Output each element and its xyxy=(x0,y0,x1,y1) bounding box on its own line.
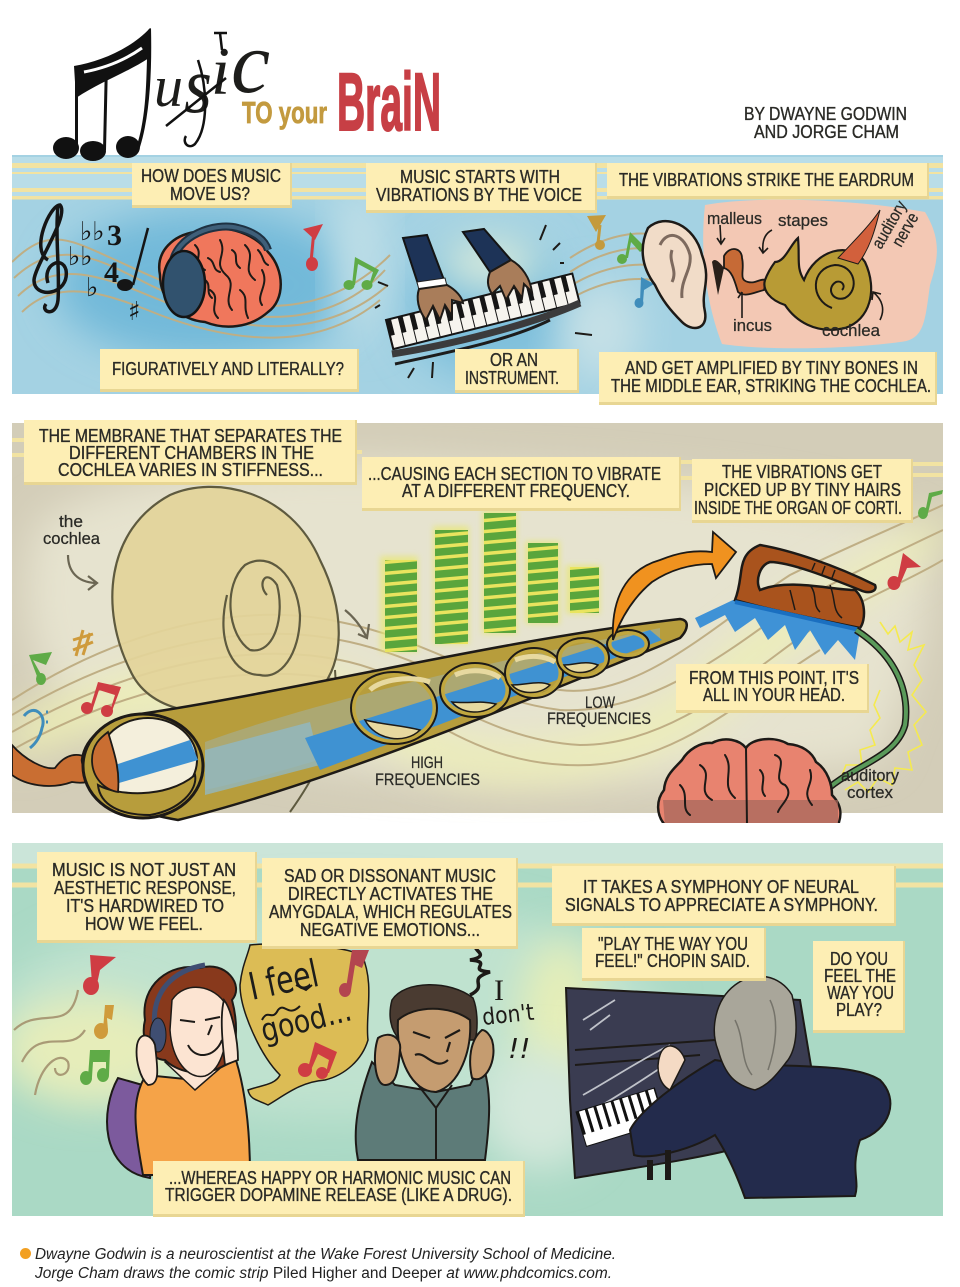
caption: do you feel the way you play: DO YOU xyxy=(830,949,888,969)
panel: how music reaches the ear xyxy=(12,155,943,405)
caption: different frequency: AT A DIFFERENT FREQUENCY. xyxy=(402,481,630,501)
caption: membrane stiffness: THE MEMBRANE THAT SEPARATES THE xyxy=(39,426,342,446)
caption: figuratively and literally xyxy=(100,349,359,392)
caption: organ of Corti: PICKED UP BY TINY HAIRS xyxy=(704,480,901,500)
title word: usic xyxy=(154,15,270,130)
icon: green note upper right xyxy=(918,490,943,519)
illustration: girl with headphones xyxy=(107,965,250,1178)
title word: usic: c xyxy=(231,15,270,112)
title word: usic: u xyxy=(154,54,183,119)
caption: hardwired to how we feel: HOW WE FEEL. xyxy=(85,914,203,934)
byline xyxy=(744,104,907,142)
labels: FREQUENCIES xyxy=(547,709,651,728)
icon: treble clef and time signature: ♭ xyxy=(86,273,98,303)
icon: gold note xyxy=(94,1005,114,1039)
caption: dopamine release: ...WHEREAS HAPPY OR HARMONIC MUSIC CAN xyxy=(169,1168,511,1188)
illustration: man covering ears xyxy=(356,945,535,1160)
caption: different frequency xyxy=(362,457,681,511)
ear labels xyxy=(707,197,922,340)
icon: blue basilar hairs xyxy=(695,600,860,660)
icon: bass clef xyxy=(24,710,48,748)
tube opening xyxy=(83,714,203,818)
caption: or an instrument: OR AN xyxy=(490,350,538,370)
illustration: man covering ears: !! xyxy=(508,1032,530,1065)
icon: squiggly music lines xyxy=(14,990,85,1095)
caption: membrane stiffness: DIFFERENT CHAMBERS IN THE xyxy=(69,443,314,463)
orange-brown stapes stub xyxy=(12,745,96,786)
labels: the xyxy=(59,512,83,531)
icon: green note xyxy=(617,232,642,264)
illustration: pianist at grand piano xyxy=(566,976,890,1198)
labels xyxy=(43,512,899,802)
ear labels: malleus xyxy=(707,209,762,228)
speech blob: I feel xyxy=(245,951,322,1009)
caption: Chopin quote: "PLAY THE WAY YOU xyxy=(598,934,748,954)
footer credits xyxy=(20,1246,616,1282)
icon: middle ear bones xyxy=(712,249,766,295)
icon: organ of Corti xyxy=(735,545,876,630)
caption: all in your head xyxy=(676,664,869,713)
icon: brain with headphones xyxy=(159,227,281,327)
caption: how does music move us: MOVE US? xyxy=(170,184,250,204)
pianist keys xyxy=(576,1088,665,1146)
icon: cochlea label arrow xyxy=(68,555,97,590)
gold staff strip xyxy=(12,440,943,478)
caption: amplified by tiny bones xyxy=(599,352,937,405)
labels: auditory xyxy=(841,766,899,785)
byline: BY DWAYNE GODWIN xyxy=(744,104,907,124)
caption: amygdala xyxy=(262,858,518,949)
caption: organ of Corti: THE VIBRATIONS GET xyxy=(722,462,882,482)
caption: symphony of neural signals: IT TAKES A SYMPHONY OF NEURAL xyxy=(583,877,859,897)
caption: amygdala: AMYGDALA, WHICH REGULATES xyxy=(269,902,512,922)
caption: membrane stiffness xyxy=(24,420,357,485)
caption: dopamine release: TRIGGER DOPAMINE RELEASE (LIKE A DRUG). xyxy=(165,1185,512,1205)
icon: treble clef and time signature: ♭♭ xyxy=(68,242,93,272)
icon: curved orange arrow xyxy=(613,532,736,640)
caption: organ of Corti: INSIDE THE ORGAN OF CORTI. xyxy=(694,498,902,518)
ear labels: auditory xyxy=(868,197,911,252)
icon: green double note xyxy=(80,1050,110,1085)
icon: treble clef and time signature: 3 xyxy=(107,219,122,252)
vibration ticks xyxy=(375,225,592,378)
caption: hardwired to how we feel: IT'S HARDWIRED TO xyxy=(66,896,224,916)
illustration: man covering ears: I xyxy=(494,974,504,1007)
caption: membrane stiffness: COCHLEA VARIES IN STIFFNESS... xyxy=(58,460,323,480)
caption: different frequency: ...CAUSING EACH SECTION TO VIBRATE xyxy=(368,464,661,484)
credit text xyxy=(34,1246,616,1282)
panel: inside the cochlea xyxy=(12,420,943,825)
speech blob xyxy=(240,944,369,1105)
staff waves right xyxy=(570,232,651,296)
byline: AND JORGE CHAM xyxy=(754,122,899,142)
icon: auditory nerve xyxy=(838,210,880,264)
icon: arrow to tube xyxy=(345,610,369,638)
caption: amplified by tiny bones: AND GET AMPLIFIED BY TINY BONES IN xyxy=(625,358,918,378)
caption: hardwired to how we feel: MUSIC IS NOT JUST AN xyxy=(52,860,236,880)
icon: brain xyxy=(658,739,840,825)
ear labels: nerve xyxy=(888,209,922,250)
labels: cortex xyxy=(847,783,893,802)
ear labels: stapes xyxy=(778,211,828,230)
staff waves xyxy=(12,505,943,765)
caption: how does music move us: HOW DOES MUSIC xyxy=(141,166,281,186)
credit text: Dwayne Godwin is a neuroscientist at the Wake Forest University School of Medicine. xyxy=(35,1246,616,1263)
icon: nerve with sparks xyxy=(831,622,927,794)
icon: treble clef and time signature: 4 xyxy=(104,256,119,289)
icon: green note xyxy=(29,652,52,685)
icon: red note xyxy=(311,230,314,262)
caption: how does music move us xyxy=(132,163,292,208)
caption: symphony of neural signals: SIGNALS TO APPRECIATE A SYMPHONY. xyxy=(565,895,878,915)
speech blob: good... xyxy=(257,991,355,1050)
caption: all in your head: ALL IN YOUR HEAD. xyxy=(703,685,845,705)
caption: vibrations by the voice xyxy=(366,163,597,213)
caption: amygdala: DIRECTLY ACTIVATES THE xyxy=(288,884,493,904)
caption: amygdala: SAD OR DISSONANT MUSIC xyxy=(284,866,496,886)
icon: music notes forming the letter M xyxy=(53,28,151,161)
caption: dopamine release xyxy=(153,1161,525,1217)
piano keys xyxy=(386,274,580,349)
caption: amygdala: NEGATIVE EMOTIONS... xyxy=(300,920,480,940)
unrolled cochlea tube xyxy=(82,619,687,820)
caption: hardwired to how we feel: AESTHETIC RESPONSE, xyxy=(54,878,236,898)
icon: green double note xyxy=(344,257,379,290)
panel: emotional response xyxy=(0,843,943,1217)
icon: gold note xyxy=(598,225,600,243)
caption: all in your head: FROM THIS POINT, IT'S xyxy=(689,668,859,688)
icon: treble clef and time signature xyxy=(34,205,148,327)
text: BraiN xyxy=(337,57,441,148)
credit text: Jorge Cham draws the comic strip Piled Higher and Deeper at www.phdcomics.com. xyxy=(34,1265,612,1282)
caption: do you feel the way you play: FEEL THE xyxy=(824,966,896,986)
labels: FREQUENCIES xyxy=(375,770,480,789)
ear labels: incus xyxy=(733,316,772,335)
title xyxy=(53,15,441,161)
caption: vibrations by the voice: VIBRATIONS BY THE VOICE xyxy=(376,185,582,205)
icon: sharp sign xyxy=(73,630,93,656)
icon: treble clef and time signature: ♯ xyxy=(128,297,141,327)
icon: red double note xyxy=(81,682,121,717)
icon: rolled cochlea spiral xyxy=(112,487,339,812)
caption: figuratively and literally: FIGURATIVELY AND LITERALLY? xyxy=(112,359,344,379)
caption: do you feel the way you play: WAY YOU xyxy=(827,983,894,1003)
icon: red note right xyxy=(888,553,921,590)
caption: vibrations strike the eardrum xyxy=(607,163,929,199)
title words: to your: TO your xyxy=(242,95,327,130)
caption: or an instrument: INSTRUMENT. xyxy=(465,368,559,388)
caption: hardwired to how we feel xyxy=(37,852,257,943)
icon: blue note xyxy=(634,277,654,308)
staff waves left xyxy=(12,240,390,338)
caption: organ of Corti xyxy=(692,459,913,523)
tube rings xyxy=(351,630,649,744)
labels: HIGH xyxy=(411,753,443,772)
title word: usic: i xyxy=(211,33,230,109)
labels: cochlea xyxy=(43,529,101,548)
pink middle ear background xyxy=(703,200,937,348)
caption: Chopin quote: FEEL!" CHOPIN SAID. xyxy=(595,951,750,971)
ear labels: cochlea xyxy=(822,321,881,340)
caption: symphony of neural signals xyxy=(552,866,896,926)
icon: ear xyxy=(643,221,706,328)
caption: vibrations by the voice: MUSIC STARTS WITH xyxy=(400,167,560,187)
labels: LOW xyxy=(585,693,615,712)
illustration: man covering ears: don't xyxy=(481,1000,535,1031)
caption: do you feel the way you play: PLAY? xyxy=(836,1000,882,1020)
caption: Chopin quote xyxy=(582,928,766,981)
caption: or an instrument xyxy=(455,349,579,393)
orange bullet xyxy=(20,1248,31,1259)
icon: treble clef and time signature: ♭♭ xyxy=(80,217,105,247)
icon: cochlea snail xyxy=(764,238,871,330)
icon: red note xyxy=(83,955,116,995)
title word: usic: s xyxy=(184,42,212,130)
caption: do you feel the way you play xyxy=(813,941,905,1033)
icon: hands playing a keyboard xyxy=(375,225,592,378)
equalizer bars xyxy=(380,510,600,652)
